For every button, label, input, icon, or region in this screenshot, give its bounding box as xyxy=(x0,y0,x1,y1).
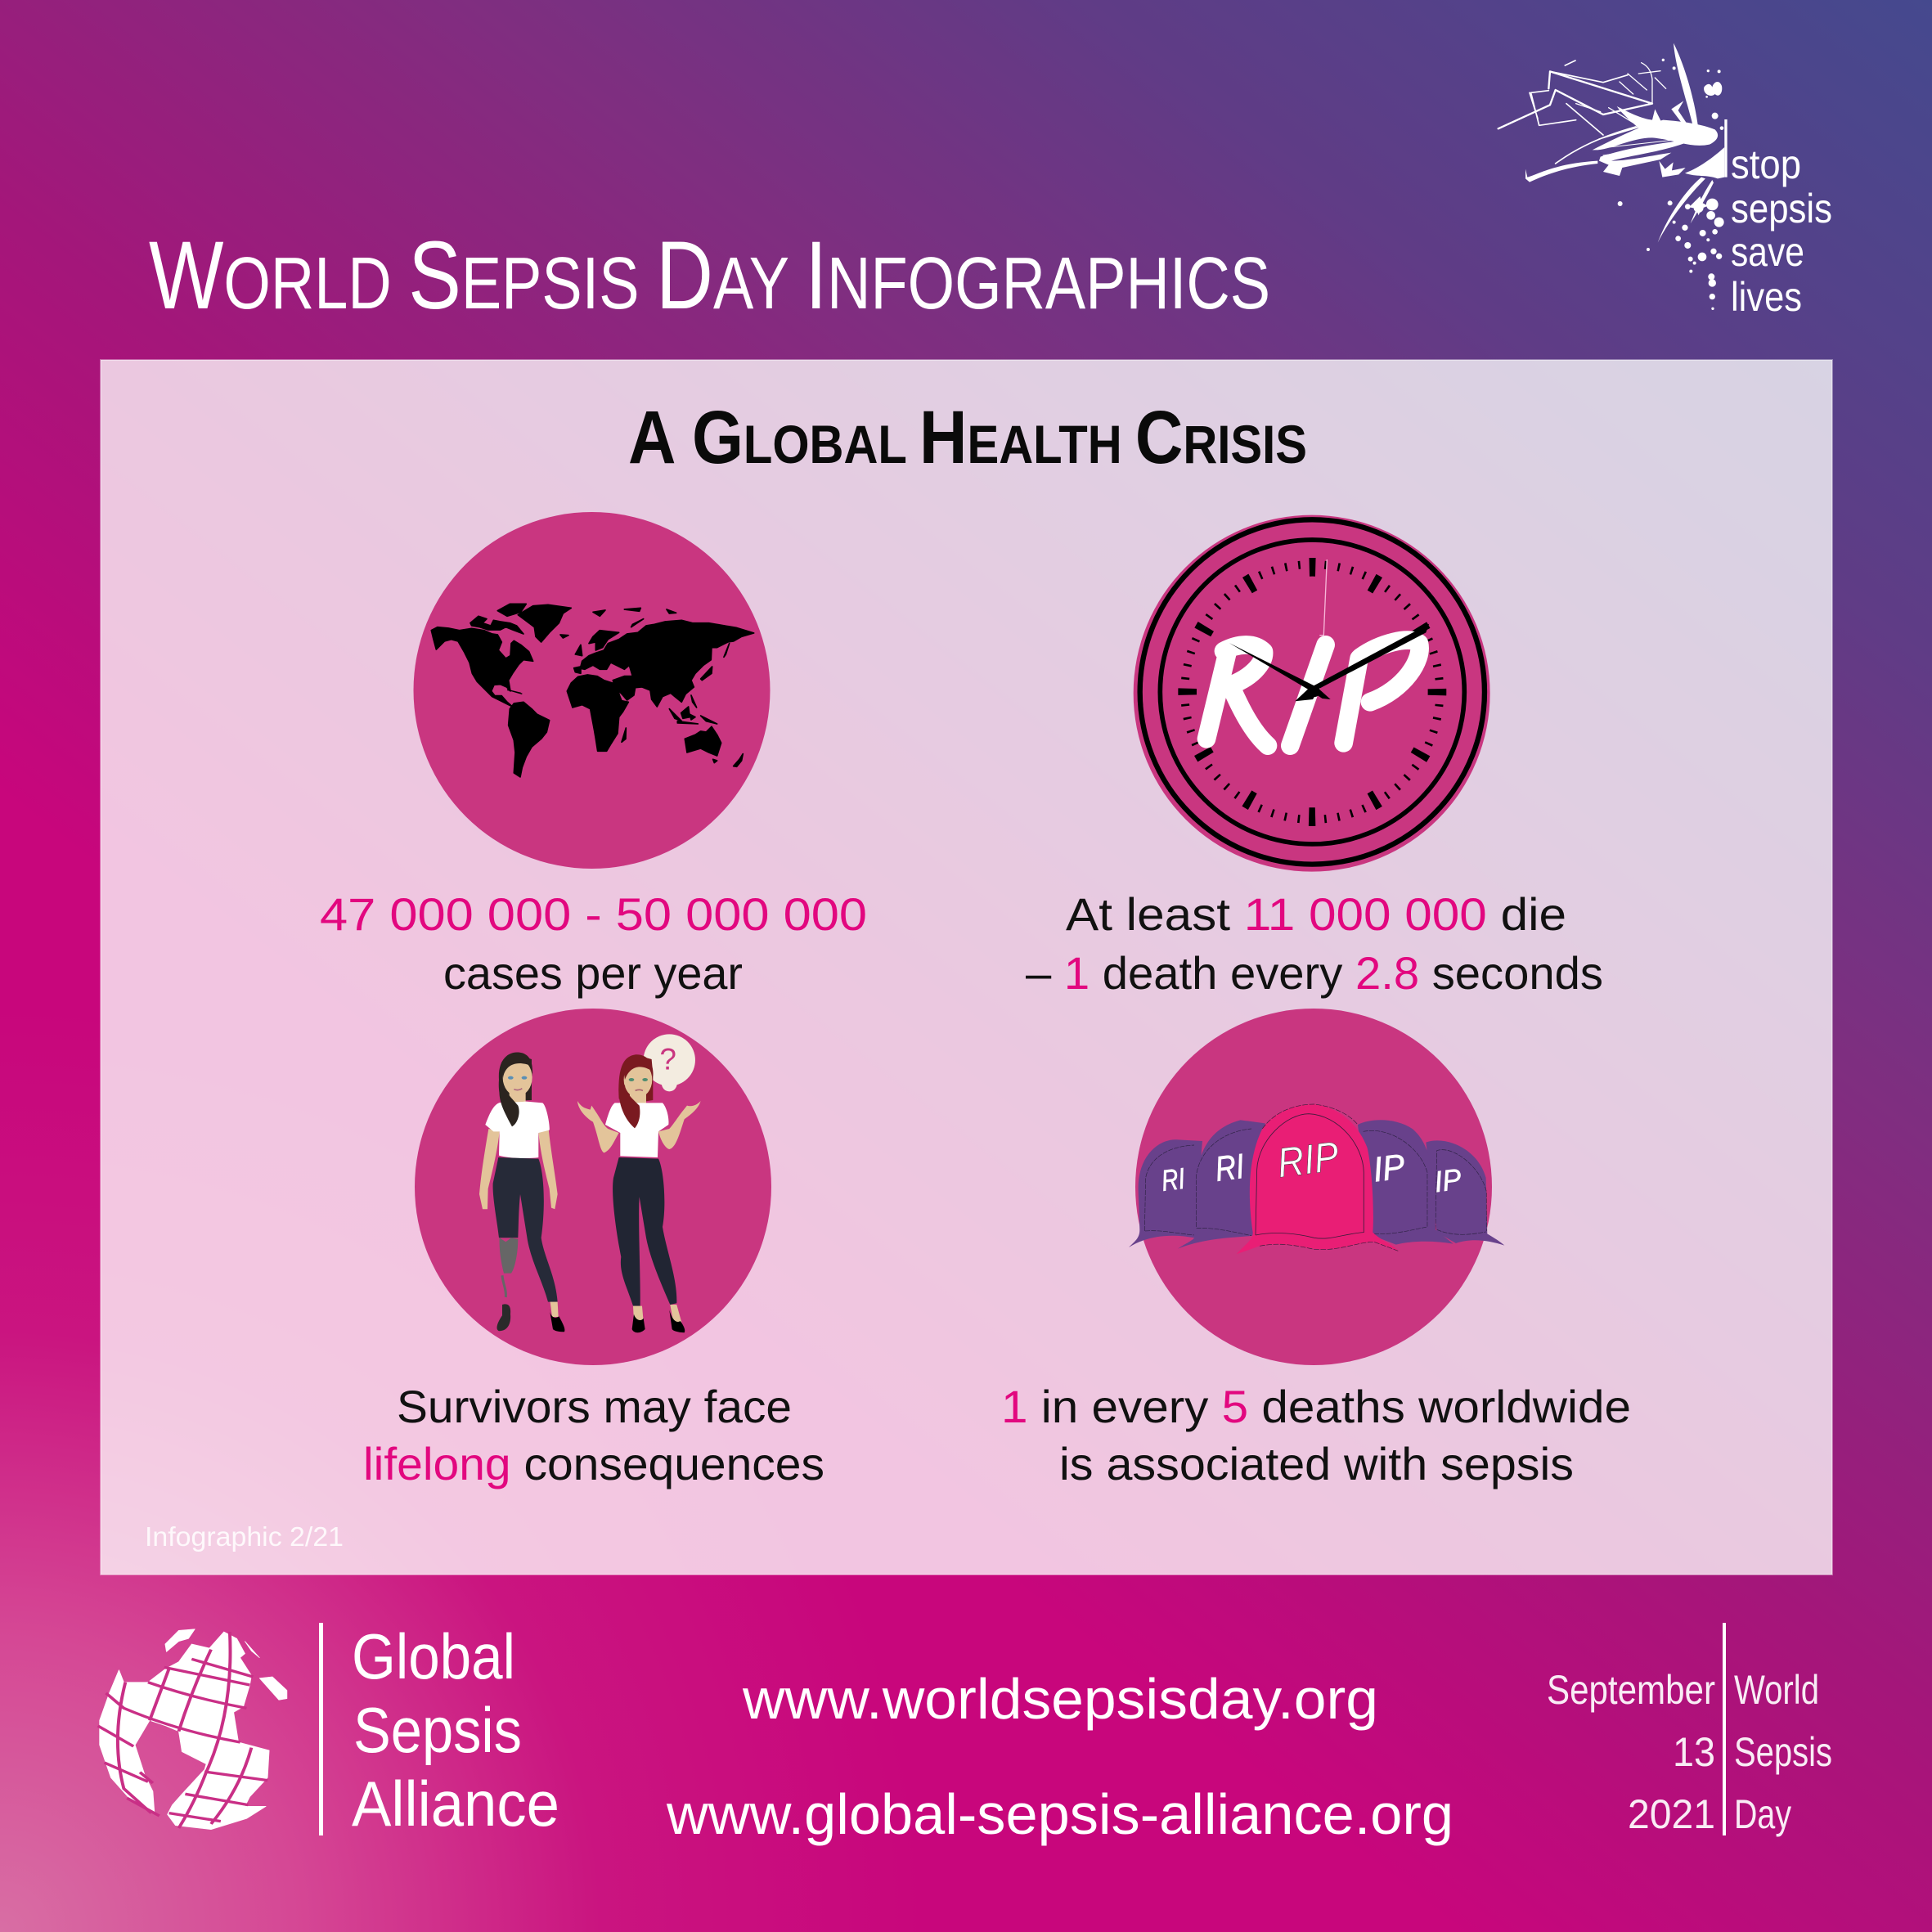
icon: centre gravestone: RIP xyxy=(1274,1133,1341,1186)
icon: far left gravestone xyxy=(1129,1139,1202,1247)
text: website links xyxy=(666,1667,1453,1846)
text: 1 in 5 deaths xyxy=(1001,1381,1631,1489)
title: WORLD SEPSIS DAY INFOGRAPHICS xyxy=(149,222,1270,330)
text: cases per year: 47 000 000 - 50 000 000 xyxy=(320,888,867,940)
text: cases per year: cases per year xyxy=(443,947,743,999)
circle: gravestones xyxy=(1129,1009,1504,1365)
text: World Sepsis Day date: 2021 xyxy=(1628,1791,1715,1837)
text: lifelong consequences: Survivors may face xyxy=(397,1381,792,1432)
text: lifelong consequences: lifelong consequences xyxy=(363,1438,824,1489)
text: website links: www.worldsepsisday.org xyxy=(742,1667,1378,1731)
icon: centre gravestone xyxy=(1237,1104,1398,1254)
icon: left gravestone xyxy=(1178,1120,1265,1249)
text: website links: www.global-sepsis-alliance.org xyxy=(666,1782,1453,1846)
icon: world map xyxy=(431,604,754,777)
text: Global Sepsis Alliance: Alliance xyxy=(352,1768,559,1840)
icon: thought bubble with question mark: ? xyxy=(659,1042,676,1076)
logo: global sepsis alliance xyxy=(98,1620,559,1840)
icon: thought bubble with question mark xyxy=(644,1034,695,1091)
icon: far right gravestone: IP xyxy=(1432,1162,1463,1198)
icon: right gravestone xyxy=(1358,1120,1453,1245)
text: Global Sepsis Alliance xyxy=(352,1620,559,1840)
icon: left gravestone: RI xyxy=(1213,1147,1247,1189)
panel: global health crisis xyxy=(101,360,1832,1575)
icon: RIP lettering xyxy=(1206,640,1420,746)
icon: woman with prosthetic leg xyxy=(479,1052,564,1332)
text: World Sepsis Day date xyxy=(1547,1623,1832,1837)
heading: A GLOBAL HEALTH CRISIS xyxy=(628,396,1307,479)
text: stop sepsis save lives: sepsis xyxy=(1731,186,1832,231)
logo: stop sepsis save lives xyxy=(1498,43,1832,320)
text: World Sepsis Day date: World xyxy=(1734,1667,1819,1713)
text: World Sepsis Day date: Day xyxy=(1734,1791,1791,1837)
icon: paint splatter xyxy=(1498,43,1728,310)
text: stop sepsis save lives: stop xyxy=(1731,142,1801,187)
icon: far left gravestone: RI xyxy=(1160,1161,1187,1197)
icon: clock hands xyxy=(1229,624,1429,701)
text: 1 in 5 deaths: is associated with sepsis xyxy=(1059,1438,1574,1489)
text: Global Sepsis Alliance: Sepsis xyxy=(353,1694,522,1766)
icon: globe xyxy=(98,1629,287,1830)
circle: two women survivors xyxy=(415,1009,771,1365)
text: 1 in 5 deaths: 1 in every 5 deaths worldwide xyxy=(1001,1381,1631,1432)
text: deaths per year: At least 11 000 000 die xyxy=(1066,888,1566,940)
text: World Sepsis Day date: 13 xyxy=(1673,1729,1715,1775)
text: World Sepsis Day date: Sepsis xyxy=(1734,1729,1832,1775)
text: infographic number: Infographic 2/21 xyxy=(145,1521,344,1552)
icon: right gravestone: IP xyxy=(1371,1147,1408,1190)
text: deaths per year: – 1 death every 2.8 seconds xyxy=(1026,947,1603,999)
text: cases per year xyxy=(320,888,867,999)
icon: woman shrugging xyxy=(577,1054,701,1332)
text: lifelong consequences xyxy=(363,1381,824,1489)
text: stop sepsis save lives: lives xyxy=(1731,274,1802,320)
text: Global Sepsis Alliance: Global xyxy=(352,1620,515,1692)
icon: far right gravestone xyxy=(1426,1140,1504,1246)
text: stop sepsis save lives xyxy=(1731,142,1832,320)
circle: clock with RIP xyxy=(1134,515,1490,872)
circle: world map xyxy=(414,512,771,869)
text: stop sepsis save lives: save xyxy=(1731,229,1804,275)
text: World Sepsis Day date: September xyxy=(1547,1667,1715,1713)
text: deaths per year xyxy=(1026,888,1603,999)
